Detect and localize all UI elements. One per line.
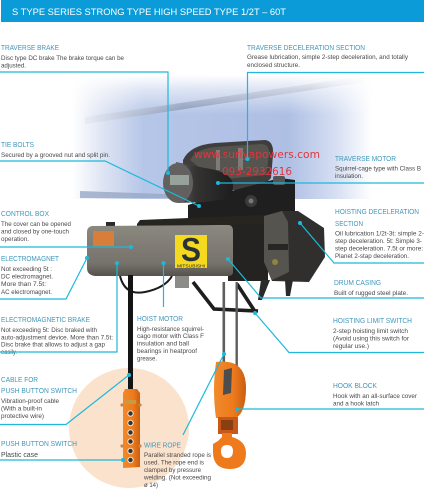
website watermark: www.suriyapowers.com bbox=[194, 148, 320, 161]
callout: traverse motor: insulation. bbox=[335, 173, 363, 180]
callout: cable for push button switch: CABLE FOR bbox=[1, 375, 38, 384]
callout: traverse deceleration section: TRAVERSE DECELERATION SECTION bbox=[247, 43, 365, 52]
callout: electromagnet: AC electromagnet. bbox=[1, 289, 52, 296]
warning label bbox=[93, 231, 114, 246]
callout: electromagnetic brake bbox=[0, 261, 119, 356]
callout: hook block bbox=[235, 381, 424, 411]
callout: push button switch: PUSH BUTTON SWITCH bbox=[1, 439, 77, 448]
callout: electromagnetic brake: auto-adjustment device. More than 7.5t: bbox=[1, 334, 113, 342]
hook block bbox=[213, 362, 246, 469]
callout: electromagnet: DC electromagnet. bbox=[1, 274, 53, 280]
callout: control box bbox=[0, 209, 133, 249]
callout: control box: CONTROL BOX bbox=[1, 209, 49, 218]
callout: drum casing: DRUM CASING bbox=[334, 278, 381, 287]
hoist illustration bbox=[87, 140, 325, 391]
S badge bbox=[175, 231, 207, 268]
callout: hoisting limit switch: 2-step hoisting limit switch bbox=[333, 328, 408, 335]
callout: traverse brake: adjusted. bbox=[1, 62, 26, 70]
header banner: S TYPE SERIES STRONG TYPE HIGH SPEED TYPE 1/2T – 60T bbox=[12, 7, 286, 18]
callout: traverse motor: Squirrel-cage type with Class B bbox=[335, 166, 421, 172]
callout: traverse deceleration section: Grease lubrication, simple 2-step deceleration, and totally bbox=[247, 54, 409, 61]
callout: hoisting deceleration section bbox=[298, 207, 424, 263]
callout: hoisting limit switch: regular use.) bbox=[333, 343, 369, 350]
callout: hoist motor: bearings in heatproof bbox=[137, 348, 197, 355]
callout: electromagnet bbox=[0, 254, 89, 299]
callout: push button switch bbox=[0, 439, 125, 462]
callout: push button switch: Plastic case bbox=[1, 450, 38, 459]
callout: control box: operation. bbox=[1, 236, 29, 243]
callout: electromagnetic brake: ELECTROMAGNETIC BRAKE bbox=[1, 315, 90, 324]
callout: wire rope: ø 14) bbox=[144, 482, 158, 489]
pendant cable bbox=[128, 275, 133, 391]
callout: hoist motor: grease. bbox=[137, 356, 157, 362]
callout: cable for push button switch: protective wire) bbox=[1, 413, 44, 420]
callout: control box: The cover can be opened bbox=[1, 221, 71, 228]
callout: drum casing bbox=[226, 257, 424, 298]
callout: drum casing: Built of rugged steel plate. bbox=[334, 290, 408, 297]
callout: control box: and closed by one-touch bbox=[1, 228, 69, 236]
S badge: MITSUBISHI bbox=[177, 264, 205, 268]
callout: hoisting deceleration section: SECTION bbox=[335, 219, 363, 228]
frame under motor bbox=[188, 178, 295, 222]
callout: hoist motor: cago motor with Class F bbox=[137, 333, 204, 340]
callout: wire rope: welding. (Not exceeding bbox=[143, 474, 211, 482]
header banner bbox=[1, 0, 424, 22]
callout: hook block: Hook with an all-surface cover bbox=[333, 393, 418, 400]
callout: wire rope: Parallel stranded rope is bbox=[144, 452, 211, 459]
website watermark: 093-2932616 bbox=[222, 165, 292, 178]
callout: hook block: HOOK BLOCK bbox=[333, 381, 377, 390]
callout: traverse deceleration section: enclosed structure. bbox=[247, 62, 300, 69]
callout: electromagnet: Not exceeding 5t : bbox=[1, 266, 52, 273]
callout: hoisting deceleration section: step deceleration. 5t: Simple 3- bbox=[335, 238, 422, 245]
callout: cable for push button switch: Vibration-proof cable bbox=[1, 398, 59, 405]
callout: wire rope bbox=[143, 352, 226, 489]
callout: tie bolts bbox=[0, 140, 201, 208]
callout: cable for push button switch: PUSH BUTTON SWITCH bbox=[1, 386, 77, 395]
callout: hoisting deceleration section: Planet 2-stap deceleration. bbox=[335, 253, 409, 260]
wire ropes bbox=[222, 282, 225, 366]
callout: wire rope: clamped by pressure bbox=[144, 467, 201, 474]
callout: wire rope: WIRE ROPE bbox=[144, 440, 181, 450]
wiring and switch box bbox=[120, 276, 172, 293]
callout: hook block: and a hook latch bbox=[333, 400, 379, 408]
callout: electromagnetic brake: Not exceeding 5t: Disc braked with bbox=[1, 327, 97, 334]
limit-switch bracket bbox=[193, 282, 258, 311]
traverse gearbox bbox=[183, 140, 273, 190]
background: crane rail and blue backdrop bbox=[72, 75, 372, 199]
peach circle behind pendant bbox=[69, 368, 189, 488]
callout: hoisting limit switch bbox=[253, 311, 424, 352]
website watermark bbox=[194, 148, 320, 178]
callout: tie bolts: TIE BOLTS bbox=[1, 140, 34, 149]
callout: traverse brake bbox=[0, 43, 170, 175]
callout: traverse brake: Disc type DC brake The brake torque can be bbox=[1, 55, 124, 62]
callout: electromagnetic brake: Disc brake that allows to adjust a gap bbox=[1, 342, 105, 348]
callout: cable for push button switch: (With a built-in bbox=[1, 406, 42, 412]
callout: hoist motor: insulation and ball bbox=[137, 340, 189, 348]
S badge: S bbox=[181, 231, 201, 268]
callout: hoist motor: High-resistance squirrel- bbox=[137, 326, 204, 333]
callout: tie bolts: Secured by a grooved nut and split pin. bbox=[1, 152, 110, 159]
callout: hoisting limit switch: (Avoid using this switch for bbox=[333, 336, 410, 342]
callout: cable for push button switch bbox=[0, 373, 131, 424]
callout: wire rope: used. The rope end is bbox=[144, 460, 204, 466]
callout: hoisting deceleration section: Oil lubrication 1/2t-3t: simple 2- bbox=[335, 230, 424, 238]
main control box body bbox=[87, 225, 233, 276]
callout: electromagnet: ELECTROMAGNET bbox=[1, 254, 60, 263]
push button pendant bbox=[120, 389, 142, 468]
callout: traverse motor bbox=[216, 154, 424, 185]
callout: hoist motor: HOIST MOTOR bbox=[137, 314, 183, 323]
callout: hoist motor bbox=[137, 261, 204, 362]
callout: electromagnet: More than 7.5t: bbox=[1, 281, 46, 288]
callout: hoisting limit switch: HOISTING LIMIT SWITCH bbox=[333, 316, 412, 325]
callout: traverse deceleration section bbox=[246, 43, 424, 161]
callout: traverse motor: TRAVERSE MOTOR bbox=[335, 154, 396, 163]
callout: electromagnetic brake: easily. bbox=[1, 349, 17, 356]
callout: traverse brake: TRAVERSE BRAKE bbox=[1, 43, 59, 52]
callout: hoisting deceleration section: HOISTING DECELERATION bbox=[335, 207, 419, 216]
hoisting gearbox bbox=[264, 211, 325, 282]
rear drum casing bbox=[228, 223, 268, 281]
callout: hoisting deceleration section: step deceleration. 7.5t or more: bbox=[335, 246, 423, 252]
traverse motor bbox=[176, 162, 233, 203]
